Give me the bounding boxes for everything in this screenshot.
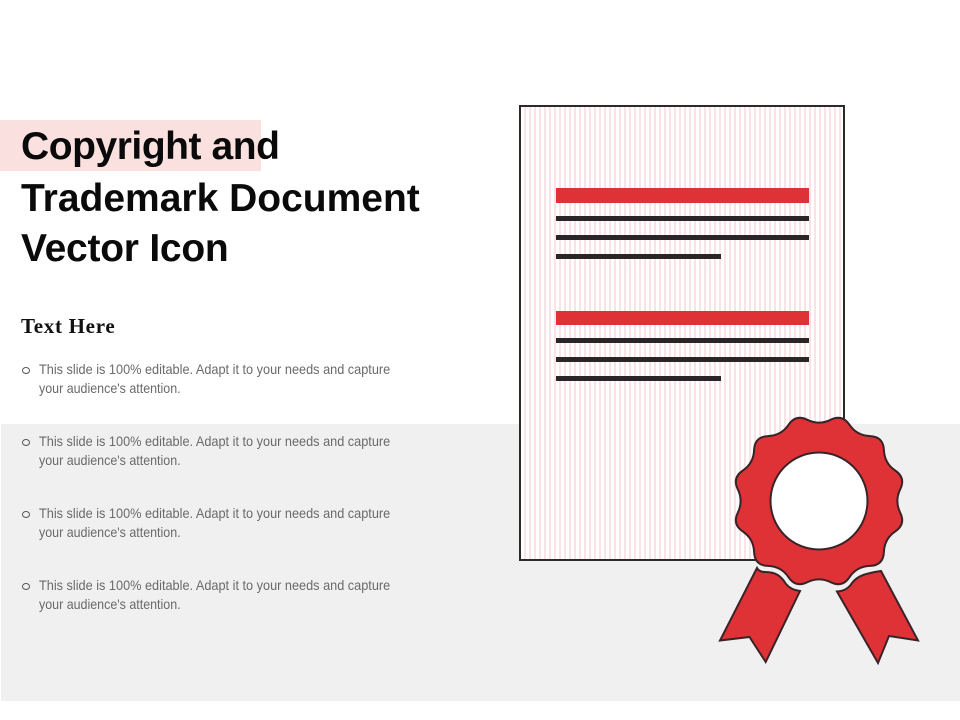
rosette <box>736 418 902 584</box>
bullet item 1: your audience's attention. <box>39 380 181 396</box>
bullet item 1 <box>22 361 390 396</box>
bullet item 4: your audience's attention. <box>39 596 181 612</box>
document icon <box>519 105 845 561</box>
bullet item 3: This slide is 100% editable. Adapt it to your needs and capture <box>39 505 390 521</box>
document text lines 2 <box>556 338 809 381</box>
bullet item 2 <box>22 433 390 468</box>
document heading bar 2 <box>556 311 809 325</box>
title: Vector Icon <box>21 227 228 270</box>
bullet item 1: This slide is 100% editable. Adapt it to your needs and capture <box>39 361 390 377</box>
bullet item 4: This slide is 100% editable. Adapt it to your needs and capture <box>39 577 390 593</box>
bullet item 3: your audience's attention. <box>39 524 181 540</box>
bullet item 3 <box>22 505 390 540</box>
title: Trademark Document <box>21 177 420 220</box>
grey lower band <box>1 424 960 701</box>
document heading bar 1 <box>556 188 809 203</box>
title: Copyright and <box>21 125 279 168</box>
bullet item 2: your audience's attention. <box>39 452 181 468</box>
bullet item 4 <box>22 577 390 612</box>
subheading: Text Here <box>21 314 115 338</box>
bullet item 2: This slide is 100% editable. Adapt it to your needs and capture <box>39 433 390 449</box>
title <box>21 125 420 270</box>
title highlight <box>0 120 261 171</box>
left ribbon tail <box>720 568 800 662</box>
rosette centre <box>770 452 868 550</box>
right ribbon tail <box>837 571 918 663</box>
document text lines 1 <box>556 216 809 259</box>
